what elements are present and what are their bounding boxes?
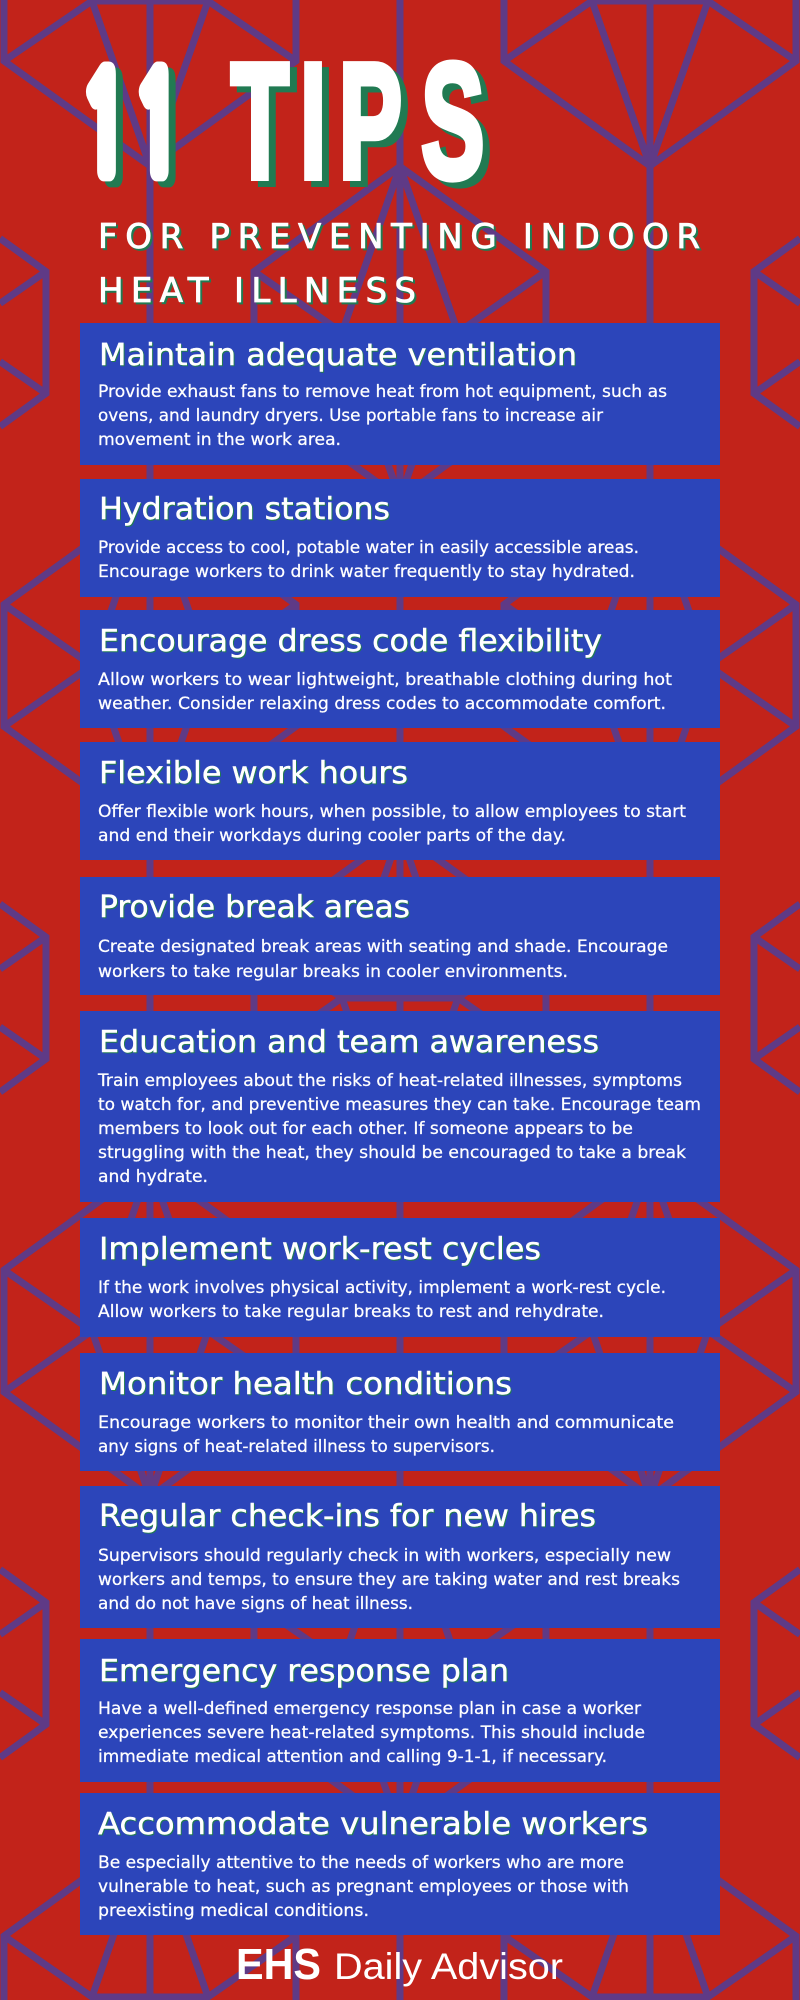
- text: hydration body: Encourage workers to drink water frequently to stay hydrated.: [98, 562, 635, 582]
- text: work-rest body: If the work involves physical activity, implement a work-rest cycle.: [98, 1278, 666, 1298]
- footer logo: EHS Daily Advisor: Daily Advisor: [334, 1946, 563, 1987]
- heading: Accommodate vulnerable workers: Accommodate vulnerable workers: [98, 1807, 648, 1842]
- heading: Implement work-rest cycles: Implement work-rest cycles: [99, 1232, 541, 1267]
- heading: Flexible work hours: Flexible work hours: [99, 756, 408, 791]
- text: hydration body: Provide access to cool, potable water in easily accessible areas.: [98, 538, 639, 558]
- heading: Maintain adequate ventilation: Maintain adequate ventilation: [99, 338, 577, 373]
- text: work-rest body: Allow workers to take regular breaks to rest and rehydrate.: [98, 1302, 604, 1322]
- text: education body: struggling with the heat, they should be encouraged to take a break: [98, 1143, 686, 1163]
- panel: vulnerable workers: [80, 1793, 720, 1935]
- text: ventilation body: Provide exhaust fans to remove heat from hot equipment, such as: [98, 382, 667, 402]
- subtitle: for preventing indoor heat illness: HEAT ILLNESS: [98, 271, 416, 311]
- text: vulnerable workers body: [98, 1853, 629, 1921]
- heading: Education and team awareness: Education and team awareness: [99, 1025, 599, 1060]
- text: education body: [97, 1071, 701, 1187]
- text: break areas body: Create designated break areas with seating and shade. Encourage: [98, 937, 668, 957]
- panel: emergency plan: [80, 1639, 720, 1782]
- text: education body: to watch for, and preventive measures they can take. Encourage team: [98, 1095, 701, 1115]
- text: dress code body: Allow workers to wear lightweight, breathable clothing during hot: [98, 670, 672, 690]
- text: ventilation body: ovens, and laundry dryers. Use portable fans to increase air: [98, 406, 603, 426]
- text: work-rest body: [98, 1278, 666, 1322]
- text: education body: and hydrate.: [98, 1167, 208, 1187]
- heading: Monitor health conditions: Monitor health conditions: [99, 1367, 512, 1402]
- text: check-ins body: and do not have signs of heat illness.: [98, 1594, 413, 1614]
- panel: education: [80, 1011, 720, 1202]
- text: ventilation body: movement in the work area.: [98, 430, 341, 450]
- panel: check-ins: [80, 1486, 720, 1628]
- text: monitor health body: any signs of heat-related illness to supervisors.: [98, 1437, 495, 1457]
- text: hydration body: [98, 538, 639, 582]
- heading: Encourage dress code flexibility: Encourage dress code flexibility: [99, 624, 602, 659]
- heading: Regular check-ins for new hires: Regular check-ins for new hires: [99, 1499, 596, 1534]
- text: vulnerable workers body: vulnerable to heat, such as pregnant employees or those with: [98, 1877, 629, 1897]
- text: vulnerable workers body: preexisting medical conditions.: [98, 1901, 369, 1921]
- text: flexible hours body: [98, 802, 686, 846]
- text: dress code body: weather. Consider relaxing dress codes to accommodate comfort.: [98, 694, 666, 714]
- title: 11 TIPS: [81, 31, 485, 213]
- title: 11 TIPS: 11: [81, 61, 181, 193]
- text: break areas body: workers to take regular breaks in cooler environments.: [98, 962, 568, 982]
- text: flexible hours body: and end their workdays during cooler parts of the day.: [98, 826, 566, 846]
- text: emergency body: experiences severe heat-related symptoms. This should include: [98, 1723, 645, 1743]
- text: monitor health body: [98, 1413, 674, 1457]
- panel: monitor health: [80, 1353, 720, 1471]
- heading: Hydration stations: Hydration stations: [99, 492, 390, 527]
- text: check-ins body: [98, 1546, 680, 1614]
- text: break areas body: [98, 937, 668, 982]
- footer logo: EHS Daily Advisor: [236, 1940, 563, 1989]
- text: check-ins body: workers and temps, to ensure they are taking water and rest breaks: [98, 1570, 680, 1590]
- text: education body: Train employees about the risks of heat-related illnesses, symptoms: [97, 1071, 682, 1091]
- heading: Emergency response plan: Emergency response plan: [99, 1654, 509, 1689]
- subtitle: for preventing indoor heat illness: FOR PREVENTING INDOOR: [98, 217, 700, 257]
- text: dress code body: [98, 670, 672, 714]
- text: emergency body: Have a well-defined emergency response plan in case a worker: [98, 1699, 641, 1719]
- text: flexible hours body: Offer flexible work hours, when possible, to allow employees to start: [98, 802, 686, 822]
- title: 11 TIPS: TIPS: [197, 31, 485, 213]
- panel: break areas: [80, 877, 720, 995]
- footer logo: EHS Daily Advisor: EHS: [236, 1940, 321, 1989]
- heading: Provide break areas: Provide break areas: [99, 890, 410, 925]
- text: education body: members to look out for each other. If someone appears to be: [98, 1119, 633, 1139]
- text: emergency body: immediate medical attention and calling 9-1-1, if necessary.: [98, 1747, 607, 1767]
- panel: work-rest cycles: [80, 1218, 720, 1337]
- panel: flexible hours: [80, 742, 720, 860]
- panel: hydration: [80, 479, 720, 597]
- text: check-ins body: Supervisors should regularly check in with workers, especially new: [98, 1546, 671, 1566]
- panel: ventilation: [80, 323, 720, 465]
- text: vulnerable workers body: Be especially attentive to the needs of workers who are more: [98, 1853, 624, 1873]
- panel: dress code: [80, 610, 720, 728]
- text: monitor health body: Encourage workers to monitor their own health and communicate: [98, 1413, 674, 1433]
- text: emergency body: [98, 1699, 645, 1767]
- subtitle: for preventing indoor heat illness: [98, 217, 700, 311]
- text: ventilation body: [98, 382, 667, 450]
